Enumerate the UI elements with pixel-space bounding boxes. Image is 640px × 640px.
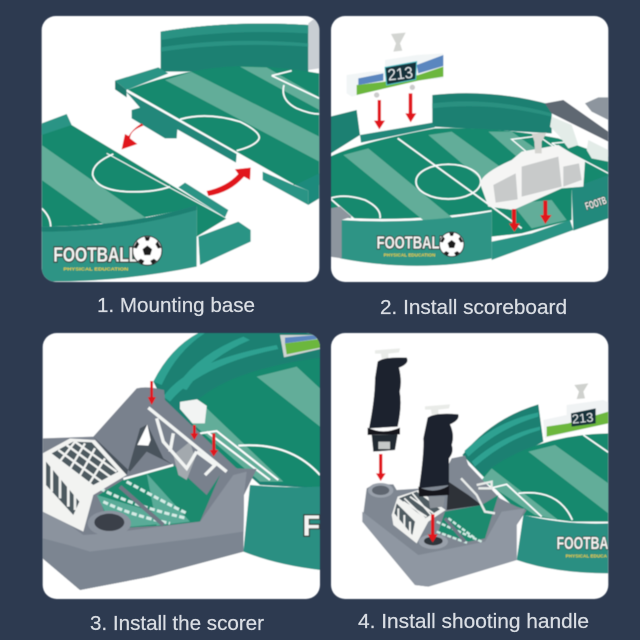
panel: step 4 install shooting handle <box>331 333 609 599</box>
panel: step 2 install scoreboard <box>330 16 608 282</box>
logo: football: FOOTBALL <box>53 245 138 267</box>
scorer white unit <box>480 117 608 210</box>
panel: step 1 mounting base <box>42 16 319 282</box>
front wall: FO <box>303 511 342 543</box>
curved wall and field <box>153 333 320 488</box>
arrows: red down <box>376 454 438 542</box>
logo: football <box>53 236 162 272</box>
label: step 4: 4. Install shooting handle <box>358 610 589 633</box>
logo: football: PHYSICAL EDUCATION <box>384 253 436 258</box>
board: FOOTBA <box>557 533 609 553</box>
arrow: red left <box>122 123 143 149</box>
base grey <box>362 456 527 587</box>
scorer frame white <box>148 401 227 475</box>
scorer parts grey <box>173 442 195 480</box>
front wall <box>242 484 321 570</box>
lower field half <box>42 114 251 282</box>
scorer white <box>461 478 495 513</box>
scoreboard <box>347 33 443 98</box>
label: step 3: 3. Install the scorer <box>90 612 264 635</box>
goal base grey <box>43 387 257 590</box>
board <box>462 404 609 573</box>
arrows: red down <box>374 93 552 232</box>
arrows: red down <box>148 381 218 457</box>
handle: installed <box>418 404 459 508</box>
upper field half <box>115 19 319 205</box>
scoreboard: 213 <box>571 410 594 427</box>
goal white <box>392 490 446 543</box>
board: PHYSICAL EDUCA <box>566 554 608 559</box>
logo: football <box>377 195 608 258</box>
label: step 2: 2. Install scoreboard <box>380 296 567 319</box>
game board <box>330 93 608 266</box>
scoreboard <box>543 383 608 438</box>
logo: football: FOOTBALL <box>377 233 447 253</box>
label: step 1: 1. Mounting base <box>97 294 255 317</box>
scoreboard: 213 <box>387 65 414 85</box>
arrow: red right <box>207 168 251 196</box>
panel: step 3 install the scorer <box>43 333 342 599</box>
logo: football: FOOTB <box>584 195 608 213</box>
logo: football: PHYSICAL EDUCATION <box>63 267 129 272</box>
handle: raised <box>368 348 407 452</box>
goal white <box>43 438 127 532</box>
